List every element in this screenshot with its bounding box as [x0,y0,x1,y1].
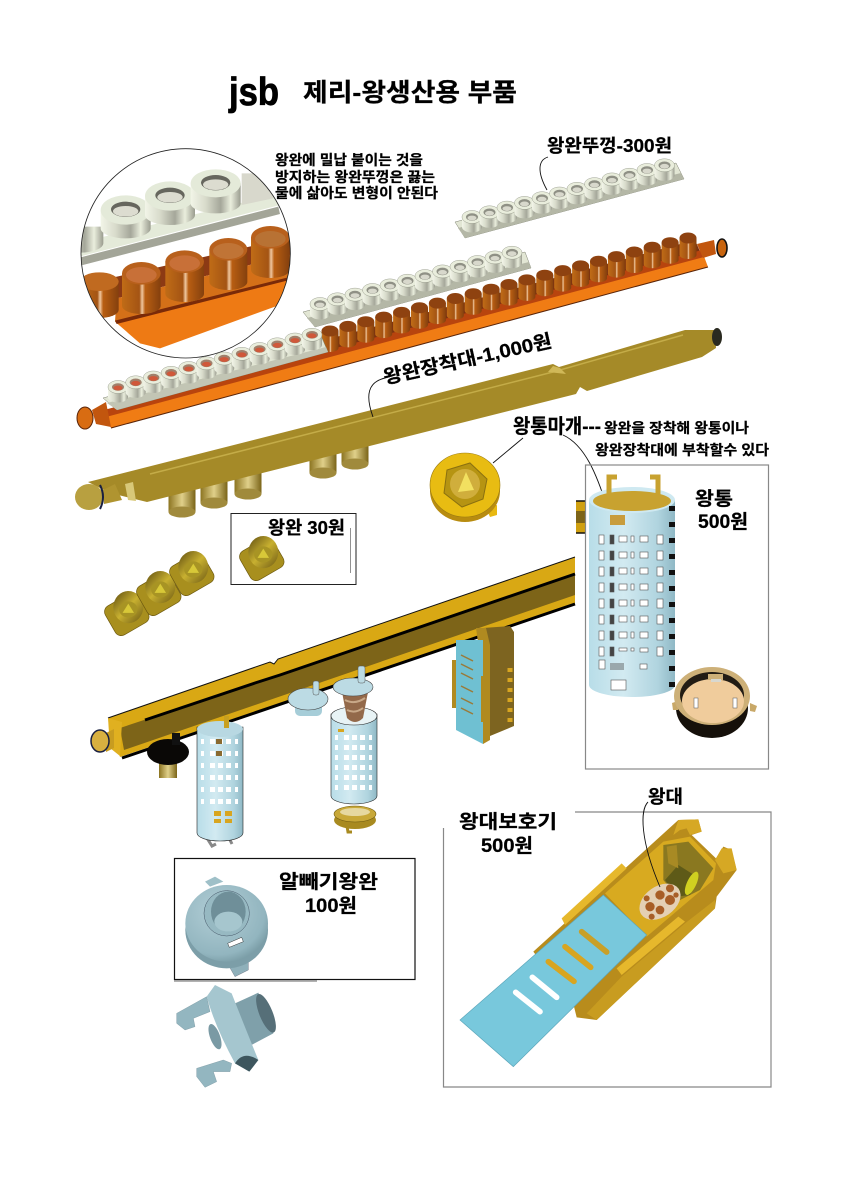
part: yellow cell cap [430,453,500,522]
panel: single cup box [231,514,356,584]
label: protector price: 500원 [481,835,533,857]
icon: single cup [237,535,287,583]
part: queen cup cover strip [455,159,684,238]
leader line: mounting bar [369,378,385,417]
label: single cup price: 왕완 30원 [268,518,345,538]
label: cell cap description: 왕통마개--- [513,415,601,438]
part: egg-removal cup top [185,877,268,977]
part: fitted cell left [197,716,243,846]
label: queen cell: 왕대 [648,787,683,807]
leader line: queen cell [643,802,660,887]
label: protector price [459,811,557,857]
title: 제리-왕생산용 부품 [303,79,517,107]
magnified circle: cover and cups [80,148,291,358]
part: orange cup bar [77,232,727,429]
label: mounting bar price: 왕완장착대-1,000원 [381,330,554,389]
part: black cap under bar [147,733,189,778]
label: egg-removal cup price: 알빼기왕완 [279,871,378,893]
label: cell cap description [513,415,769,458]
part: cover strip above bar [303,246,531,327]
callout: cover description: 방지하는 왕완뚜껑은 끓는 [275,169,435,185]
cell windows [599,535,663,690]
panel: egg-removal cup box [174,858,415,981]
part: olive cup mounting bar [75,328,722,518]
part: small blue cap [288,681,328,716]
part: gold bar assembly [91,501,585,758]
callout: cover description: 물에 삶아도 변형이 안된다 [275,185,438,201]
panel: protector box [444,811,771,1087]
title [228,71,517,114]
cocoon [633,876,687,927]
part: cover strip fitted on orange bar [103,328,328,410]
label: protector price: 왕대보호기 [459,811,557,833]
label: cover price: 왕완뚜껑-300원 [547,136,672,156]
title: jsb [228,71,279,114]
part: large queen cell [589,477,675,697]
label: cell cap description: 왕완을 장착해 왕통이나 [604,420,749,436]
leader line: cover [540,157,548,190]
label: cell price: 500원 [698,511,748,533]
part: egg-removal cup side [177,985,280,1087]
label: egg-removal cup price: 100원 [305,895,357,917]
label: egg-removal cup price [279,871,378,917]
label: cell price: 왕통 [695,488,733,510]
part: cell end cap [672,667,757,738]
leader lines: cap and cell [493,435,607,507]
part: queen cell protector [460,819,737,1067]
callout: cover description [275,152,438,201]
panel: cell box [586,465,768,769]
part: blue protector mounted on bar [452,626,514,744]
callout: cover description: 왕완에 밀납 붙이는 것을 [275,152,423,168]
label: cell cap description: 왕완장착대에 부착할수 있다 [595,442,769,458]
label: cell price [695,488,748,533]
part: three cups [102,550,217,638]
part: fitted cell with cocoon [331,666,377,832]
